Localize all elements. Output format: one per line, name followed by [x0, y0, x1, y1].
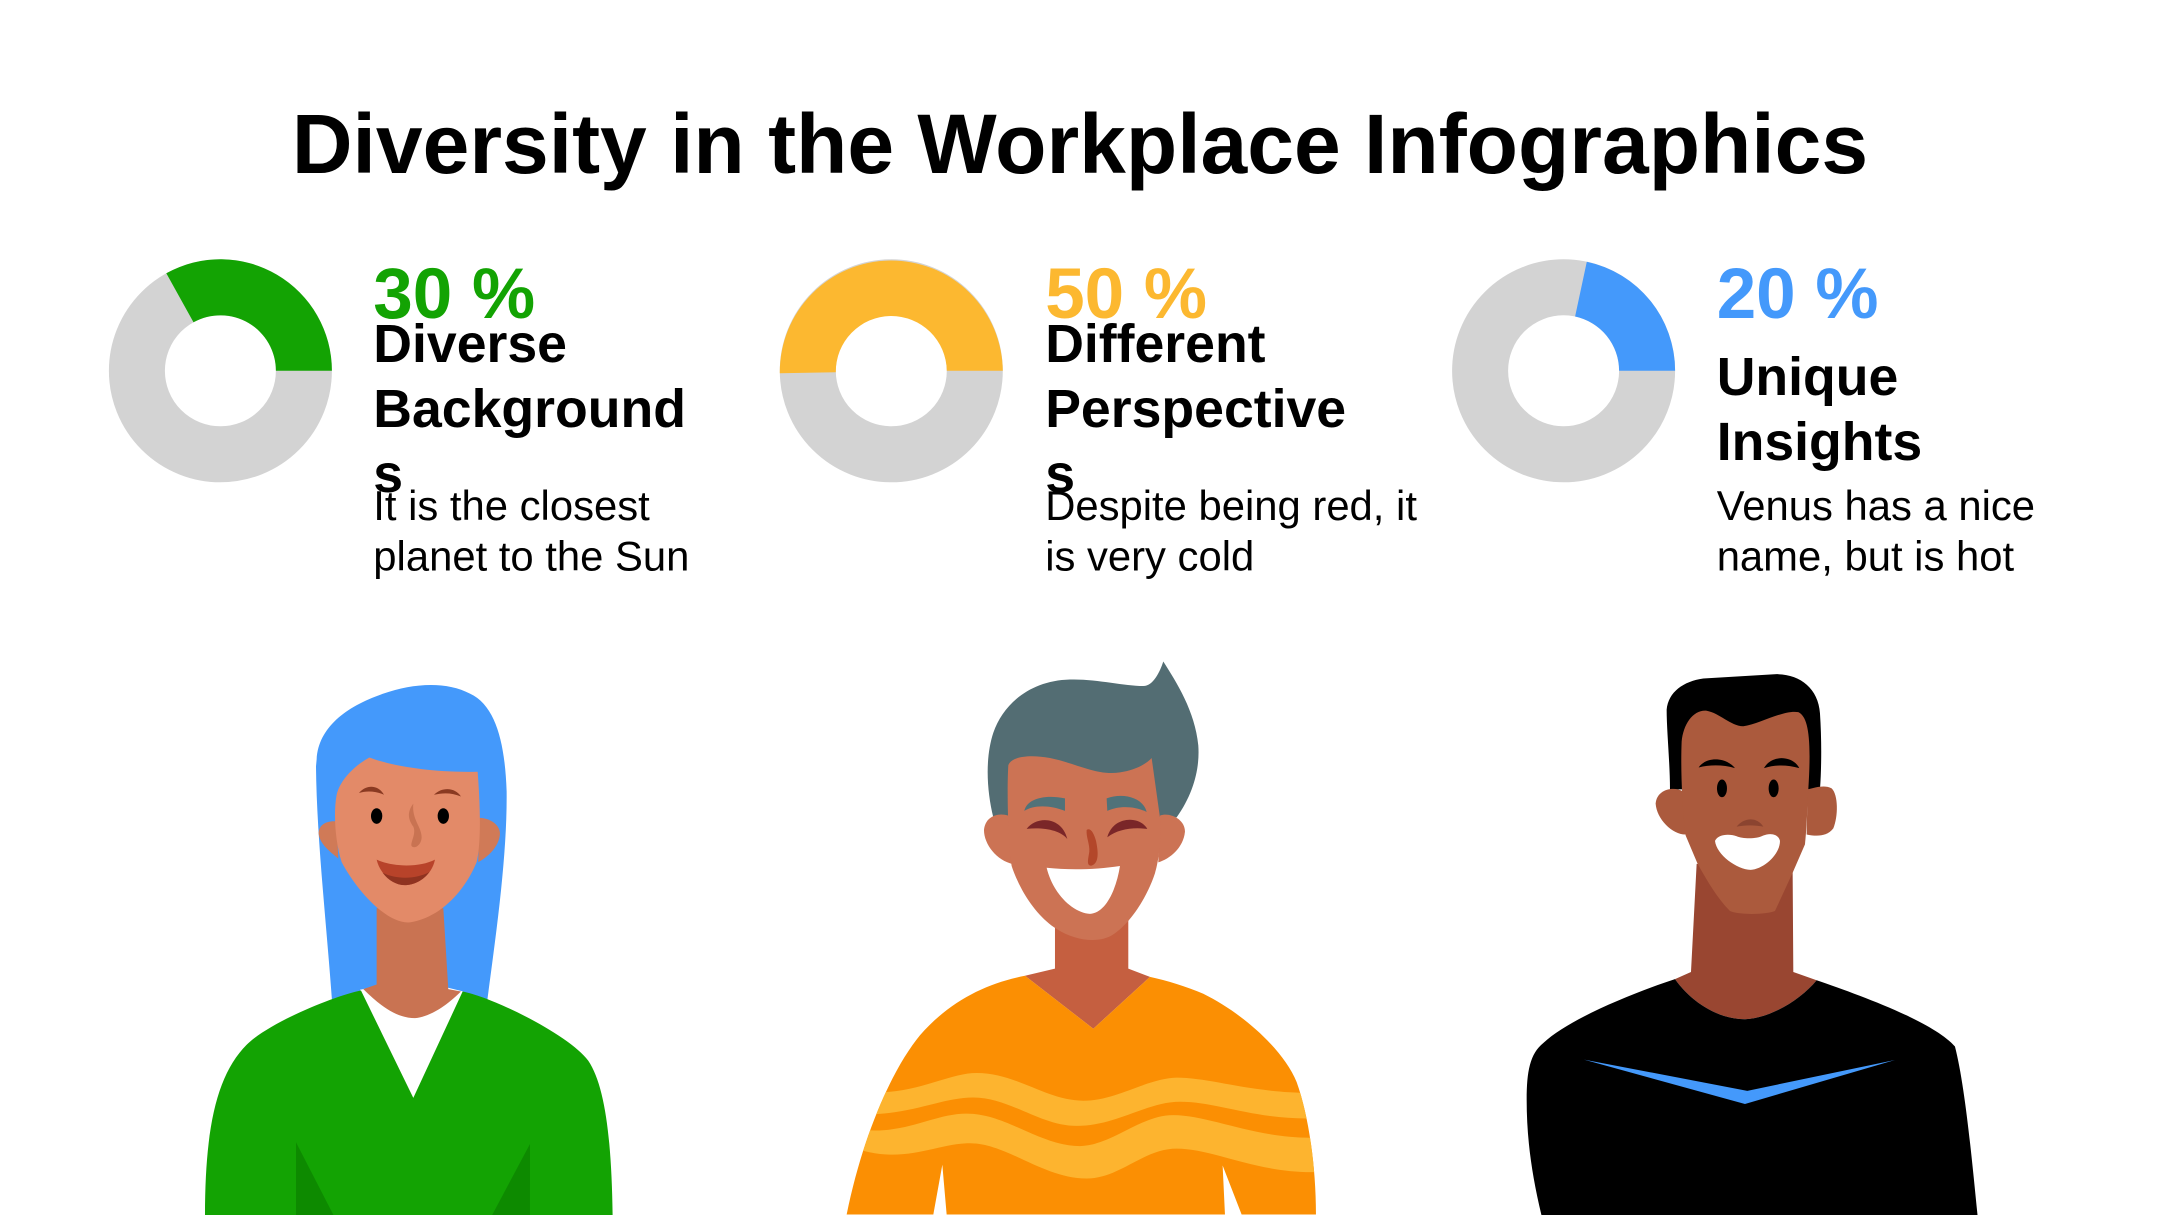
description: red but cold: is very cold: [1045, 532, 1254, 580]
panel: unique insights stat: [1480, 255, 2035, 580]
heading: Unique Insights: Insights: [1717, 412, 1922, 472]
panel: different perspectives stat: [780, 255, 1417, 580]
description: Venus: name, but is hot: [1717, 532, 2014, 580]
heading: Different Perspectives: Perspective: [1045, 379, 1346, 439]
description: Venus: Venus has a nice: [1717, 482, 2035, 529]
description: closest planet: It is the closest: [373, 482, 650, 529]
title: Diversity in the Workplace Infographics: [292, 97, 1868, 191]
heading: Diverse Backgrounds: Diverse: [373, 314, 567, 374]
heading: Different Perspectives: s: [1045, 444, 1075, 504]
description: closest planet: planet to the Sun: [373, 532, 689, 580]
illustration: man with grey hair and orange sweater: [843, 662, 1330, 1214]
donut chart: 30 percent: [137, 259, 332, 454]
heading: Different Perspectives: Different: [1045, 314, 1266, 374]
percentage: 20 %: 20 %: [1717, 255, 1879, 334]
illustration: man with black hair and black shirt: [1527, 674, 1978, 1215]
heading: Diverse Backgrounds: Background: [373, 379, 686, 439]
percentage: 30 %: 30 %: [373, 255, 535, 334]
heading: Unique Insights: Unique: [1717, 347, 1898, 407]
donut chart: 50 percent: [780, 261, 1003, 454]
heading: Diverse Backgrounds: s: [373, 444, 403, 504]
percentage: 50 %: 50 %: [1045, 255, 1207, 334]
illustration: woman with blue hair and green top: [205, 685, 613, 1215]
description: red but cold: Despite being red, it: [1045, 482, 1417, 529]
panel: diverse backgrounds stat: [137, 255, 689, 580]
donut chart: 20 percent: [1480, 262, 1675, 454]
